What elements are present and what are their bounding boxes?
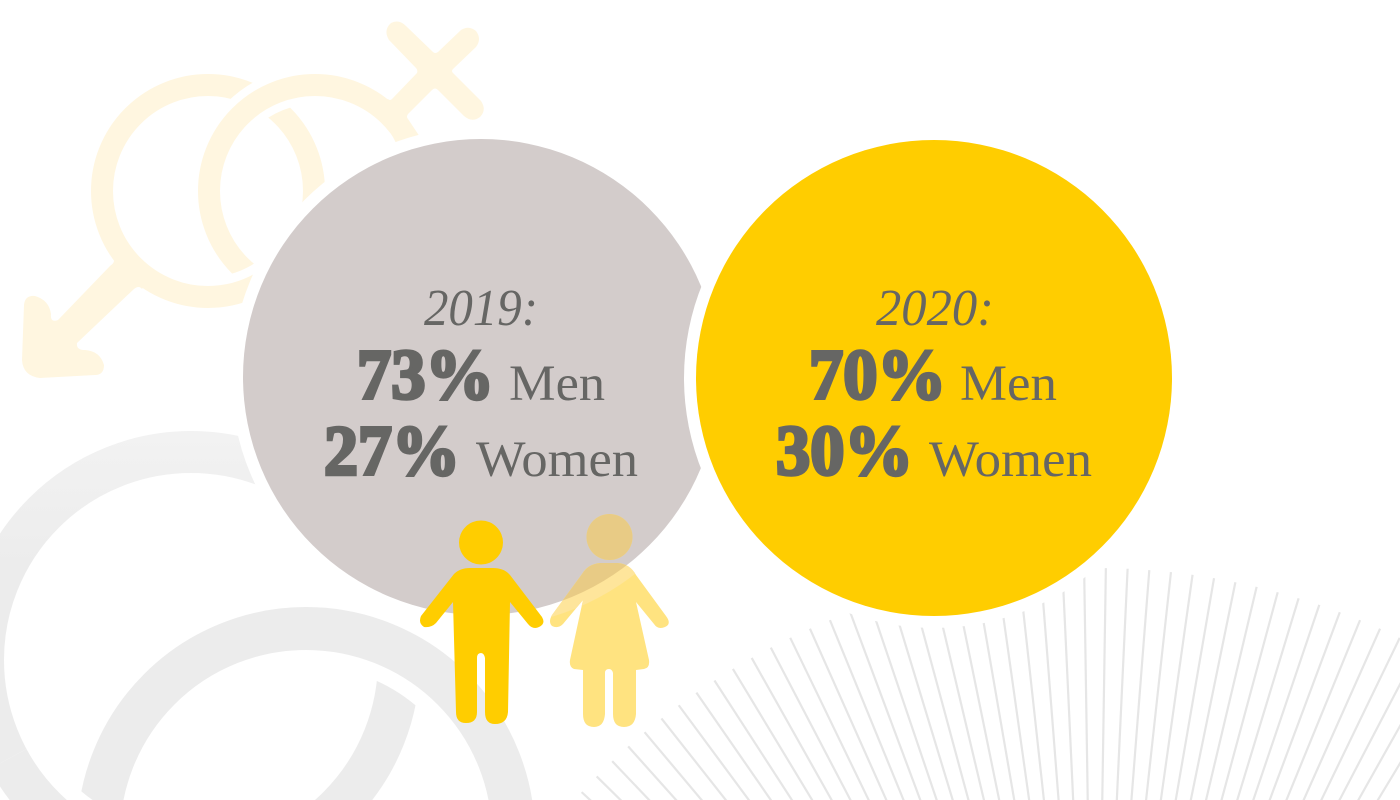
text: 2019 statistics: Men — [509, 356, 605, 412]
text: 2020 statistics: Women — [929, 432, 1092, 488]
icon: woman figure — [550, 514, 669, 727]
icon: cream male and female symbols — [22, 22, 484, 378]
sunburst lines — [582, 568, 1400, 800]
text: 2020 statistics: 70% — [809, 336, 946, 414]
text: 2019 statistics: 73% — [357, 336, 494, 414]
text: 2020 statistics: Men — [960, 356, 1057, 412]
icon: large grey interlocked gender rings — [0, 452, 514, 800]
text: 2020 statistics — [776, 280, 1092, 490]
text: 2019 statistics: Women — [476, 432, 638, 488]
text: 2019 statistics — [324, 280, 638, 490]
text: 2020 statistics: 30% — [776, 412, 913, 490]
icon: man figure — [420, 520, 543, 724]
panel: 2019 grey circle — [231, 127, 731, 627]
panel: 2020 yellow circle — [684, 128, 1184, 628]
text: 2020 statistics: 2020: — [876, 280, 994, 337]
text: 2019 statistics: 2019: — [424, 280, 538, 337]
text: 2019 statistics: 27% — [324, 412, 460, 490]
